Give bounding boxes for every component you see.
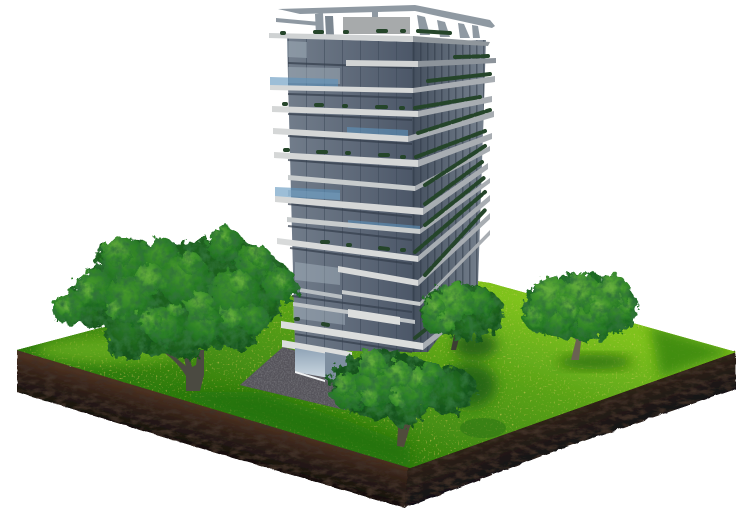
canopy — [420, 283, 504, 341]
left lawn highlight — [35, 336, 185, 364]
shadow of right tree — [557, 355, 633, 369]
rooftop and balcony shrubs — [282, 31, 490, 338]
right facade — [412, 40, 486, 352]
tree: right lawn — [522, 274, 638, 360]
lobby base line — [295, 371, 325, 382]
trunk — [565, 328, 590, 360]
tree: front tree — [329, 350, 506, 447]
canopy — [52, 227, 302, 359]
left facade — [287, 38, 412, 352]
tower — [269, 5, 496, 382]
canopy — [522, 274, 638, 342]
pool balconies — [270, 77, 420, 233]
lawn shading — [35, 325, 736, 468]
trunk — [386, 408, 418, 447]
trunk — [451, 335, 460, 350]
lobby glass — [295, 348, 352, 382]
shadow of mid tree — [453, 331, 497, 359]
trunk — [163, 350, 204, 391]
lobby side glass — [325, 352, 352, 382]
grass top — [17, 270, 736, 468]
driveway — [240, 347, 345, 410]
roof pergola — [276, 5, 495, 38]
tree: large oak, left — [52, 227, 302, 391]
soil: left cut face — [17, 350, 410, 508]
front edge shadow — [165, 392, 410, 468]
shrub near front edge — [460, 418, 506, 438]
floor slabs: left and right bands — [269, 33, 496, 359]
right corner shade — [650, 325, 736, 378]
soil: right cut face — [405, 351, 736, 508]
dark window bands — [288, 63, 412, 352]
canopy — [329, 350, 477, 428]
glass highlights — [287, 41, 345, 325]
shadow of front tree — [444, 363, 496, 407]
ground block — [17, 270, 736, 508]
tree: mid tree behind front tree — [420, 283, 504, 350]
